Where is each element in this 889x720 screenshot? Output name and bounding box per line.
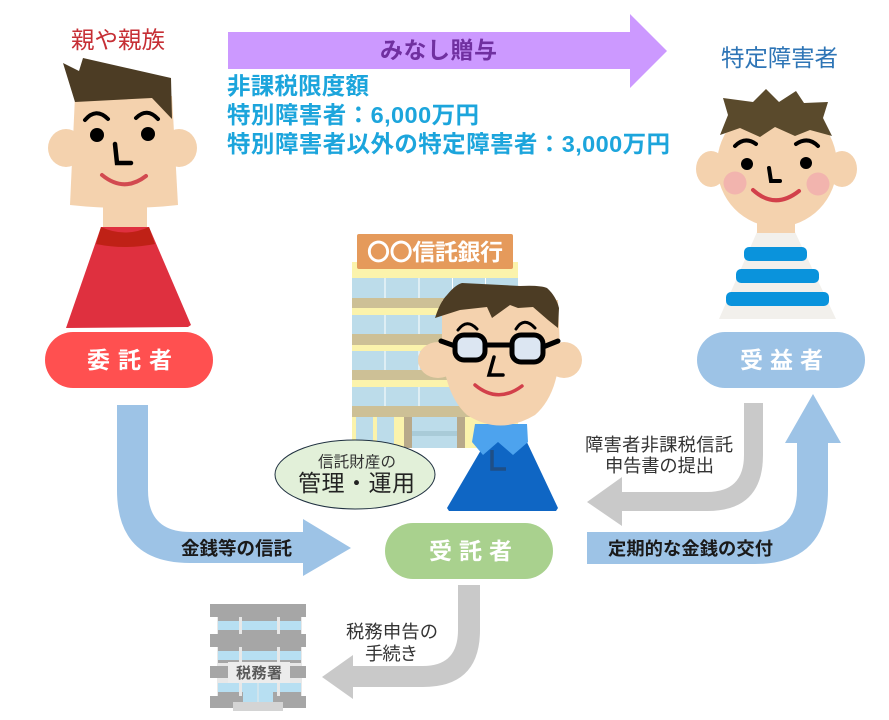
neck bbox=[103, 195, 147, 237]
mark bbox=[492, 450, 506, 469]
floor bands bbox=[352, 298, 518, 417]
hair bbox=[720, 89, 832, 137]
text block: 非課税限度額: 特別障害者以外の特定障害者：3,000万円 bbox=[227, 131, 670, 157]
sign bbox=[228, 662, 290, 683]
illustration: trust bank building bbox=[352, 234, 518, 448]
arrow: 金銭等の信託 bbox=[117, 405, 351, 576]
features bbox=[85, 113, 158, 163]
body bbox=[447, 438, 558, 511]
callout: 信託財産の管理・運用: 信託財産の bbox=[318, 453, 396, 471]
slabs bbox=[210, 604, 306, 708]
ears bbox=[48, 129, 197, 167]
eyebrows bbox=[458, 322, 535, 330]
text: 税務申告の手続き: 税務申告の bbox=[346, 621, 438, 642]
columns bbox=[239, 617, 280, 702]
text block: 非課税限度額 bbox=[227, 73, 670, 157]
arrow: 定期的な金銭の交付: 定期的な金銭の交付 bbox=[608, 538, 773, 559]
face bbox=[717, 103, 837, 227]
text: 税務申告の手続き bbox=[346, 621, 438, 664]
arrow: みなし贈与: みなし贈与 bbox=[380, 37, 497, 63]
sign text: 税務署 bbox=[236, 665, 282, 682]
eyes bbox=[741, 157, 812, 170]
text: 障害者非課税信託申告書の提出: 申告書の提出 bbox=[605, 455, 714, 476]
cheeks bbox=[724, 172, 830, 196]
hair bbox=[63, 58, 172, 119]
pill: 委託者 bbox=[45, 332, 213, 388]
smile bbox=[753, 190, 799, 200]
illustration: trustee man with glasses bbox=[418, 283, 582, 511]
windows bbox=[218, 621, 301, 702]
callout: 信託財産の管理・運用: 管理・運用 bbox=[298, 470, 415, 496]
body bbox=[66, 227, 191, 328]
face bbox=[70, 96, 178, 208]
arrow: みなし贈与 bbox=[228, 14, 667, 88]
sign bbox=[357, 234, 513, 269]
text: 障害者非課税信託申告書の提出: 障害者非課税信託 bbox=[585, 434, 733, 455]
pill: 受益者 bbox=[697, 332, 865, 388]
face bbox=[442, 300, 560, 426]
collar bbox=[472, 424, 528, 455]
pill: 受益者: 受益者 bbox=[740, 347, 823, 373]
sign text: 〇〇信託銀行 bbox=[367, 239, 503, 265]
ears bbox=[696, 151, 857, 187]
label: 親や親族: 親や親族 bbox=[71, 27, 165, 53]
body bbox=[217, 617, 302, 699]
arrow: 定期的な金銭の交付 bbox=[587, 394, 841, 564]
neck bbox=[757, 215, 795, 233]
collar bbox=[96, 227, 155, 247]
illustration: tax office bbox=[210, 604, 306, 711]
callout: 信託財産の管理・運用 bbox=[275, 440, 435, 509]
arrow: 税務申告 bbox=[322, 585, 480, 699]
building body bbox=[352, 262, 518, 448]
text block: 非課税限度額: 非課税限度額 bbox=[227, 73, 370, 99]
arrow: 金銭等の信託: 金銭等の信託 bbox=[181, 538, 292, 559]
hair bbox=[435, 283, 559, 328]
text block: 非課税限度額: 特別障害者：6,000万円 bbox=[227, 102, 479, 128]
label: 特定障害者: 特定障害者 bbox=[721, 45, 838, 71]
illustration: settlor man bbox=[48, 58, 197, 328]
body bbox=[719, 232, 836, 319]
eyes bbox=[90, 127, 155, 142]
pill: 受託者: 受託者 bbox=[429, 538, 512, 564]
text: 税務申告の手続き: 手続き bbox=[365, 643, 418, 664]
illustration: beneficiary boy bbox=[696, 89, 857, 319]
nose bbox=[489, 357, 503, 375]
arrow: 申告書の提出 bbox=[587, 403, 763, 526]
stripes bbox=[726, 247, 829, 306]
smile bbox=[475, 385, 522, 395]
steps bbox=[233, 702, 283, 711]
features bbox=[735, 140, 818, 181]
pill: 委託者: 委託者 bbox=[87, 347, 172, 373]
window grey bands bbox=[218, 617, 301, 696]
windows bbox=[352, 278, 518, 448]
pill: 受託者 bbox=[385, 523, 553, 579]
window dividers bbox=[384, 278, 486, 406]
ears bbox=[418, 342, 582, 378]
smile bbox=[102, 175, 146, 184]
text: 障害者非課税信託申告書の提出 bbox=[585, 434, 733, 476]
entrance columns bbox=[404, 417, 465, 448]
glasses bbox=[441, 335, 558, 362]
